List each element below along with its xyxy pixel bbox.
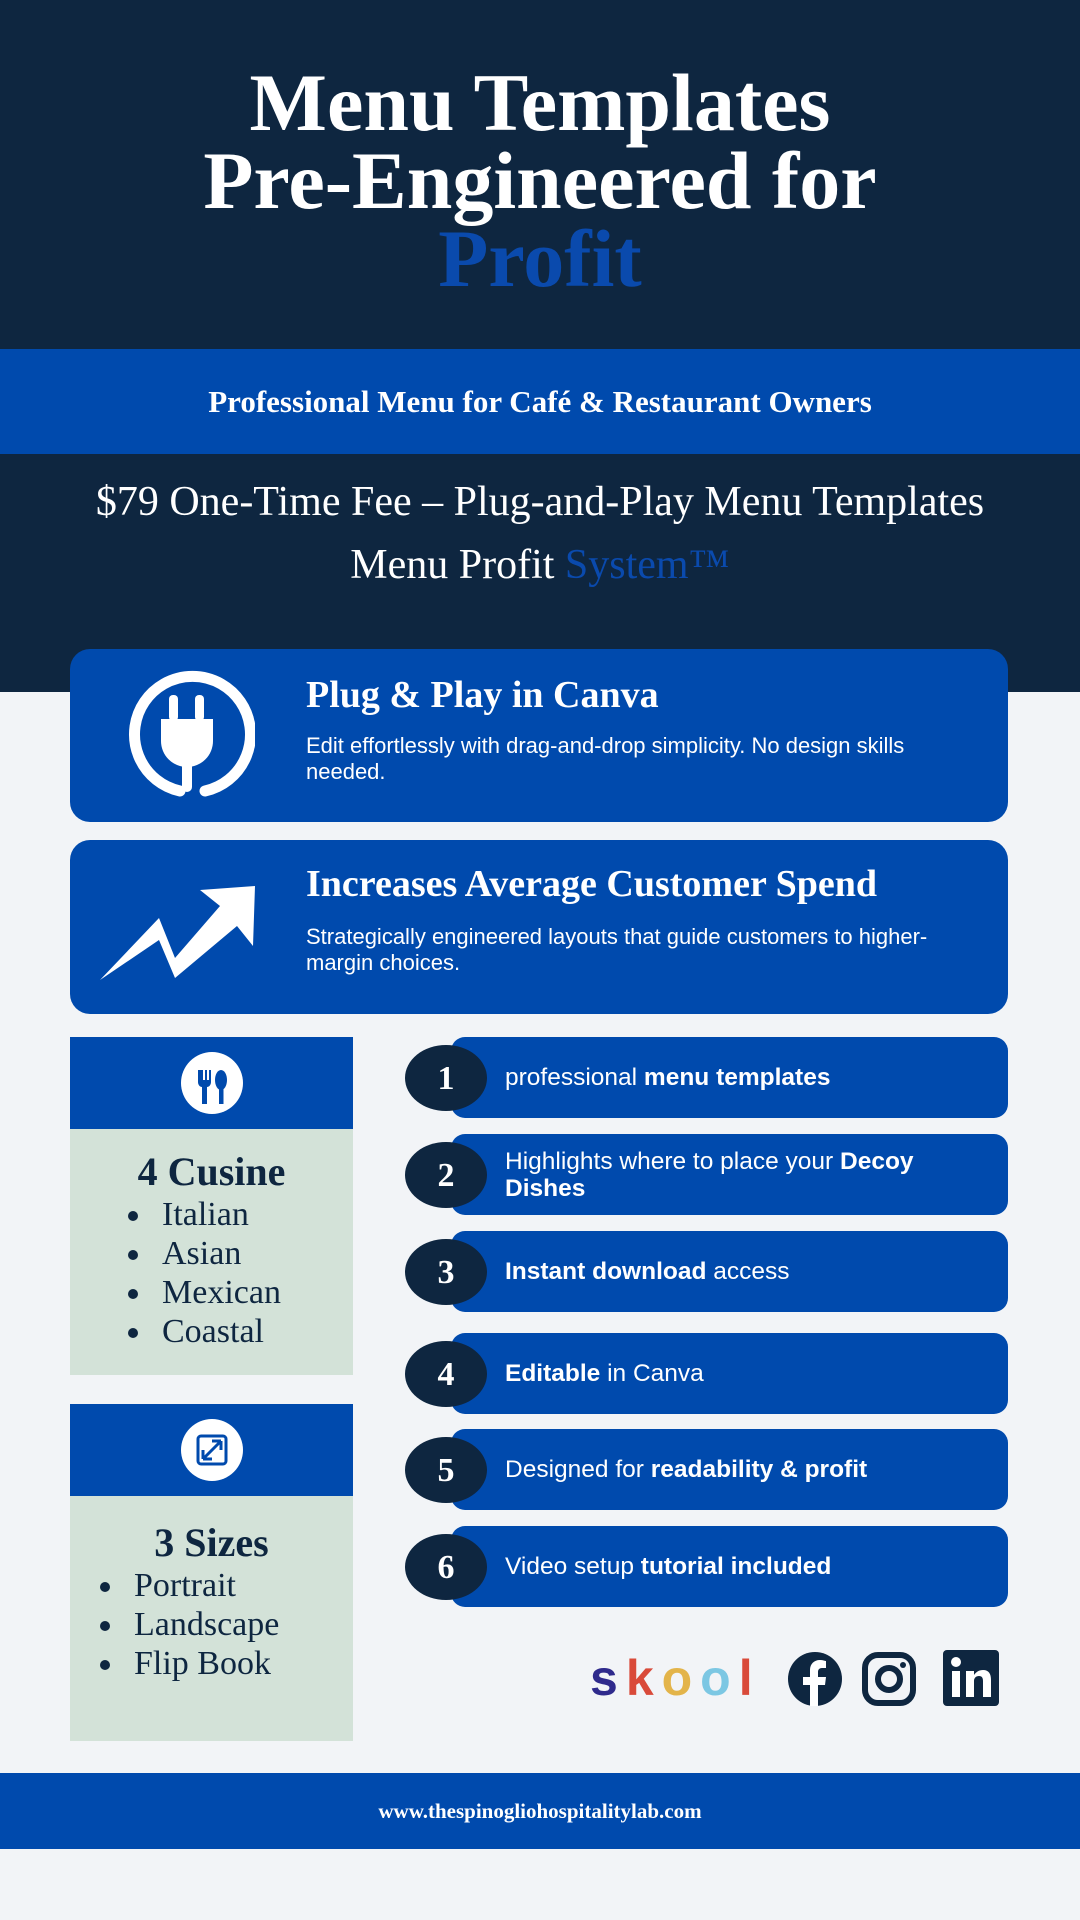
icon: rising arrow	[100, 886, 255, 980]
panel: cuisines: Mexican	[162, 1274, 281, 1311]
card: plug & play: Edit effortlessly with drag-and-drop simplicity. No design skills needed.	[306, 733, 904, 784]
panel: cuisines: Asian	[162, 1235, 241, 1272]
card: customer spend	[70, 840, 1008, 1014]
text: 3	[438, 1254, 454, 1290]
panel: cuisines	[70, 1037, 353, 1375]
title: Menu Templates	[250, 57, 830, 148]
subtitle band	[0, 349, 1080, 454]
dark pricing section	[0, 454, 1080, 692]
logo: skool: skool	[590, 1650, 761, 1706]
text: 4	[438, 1356, 454, 1392]
icon: fork and spoon	[181, 1052, 243, 1114]
text: 1	[438, 1060, 454, 1096]
feature row 1: professional menu templates	[505, 1064, 830, 1091]
feature row 3: Instant download access	[505, 1258, 790, 1285]
panel: sizes: 3 Sizes	[154, 1520, 269, 1565]
text: 2	[438, 1156, 454, 1194]
text: 6	[438, 1548, 454, 1586]
feature row 2	[451, 1134, 1008, 1215]
panel: cuisines: 4 Cusine	[138, 1149, 285, 1194]
text: 5	[438, 1452, 454, 1488]
feature row 3	[451, 1231, 1008, 1312]
header background	[0, 0, 1080, 349]
title: Profit	[438, 213, 642, 304]
dark pricing section: Menu Profit System™	[350, 542, 730, 588]
feature row 2: Highlights where to place your Decoy Dishes	[505, 1148, 914, 1202]
feature row 4: Editable in Canva	[505, 1360, 704, 1387]
panel: sizes: Flip Book	[134, 1645, 271, 1682]
logo: linkedin	[943, 1650, 999, 1706]
title	[203, 57, 877, 304]
feature row 6: Video setup tutorial included	[505, 1553, 831, 1580]
panel: sizes	[70, 1404, 353, 1741]
panel: sizes: Portrait	[134, 1567, 236, 1604]
panel: sizes: Landscape	[134, 1606, 279, 1643]
icon: resize	[181, 1419, 243, 1481]
feature row 5	[451, 1429, 1008, 1510]
card: customer spend: Increases Average Customer Spend	[306, 863, 877, 905]
footer	[0, 1773, 1080, 1849]
feature row 1	[451, 1037, 1008, 1118]
title: Pre-Engineered for	[203, 135, 877, 226]
card: customer spend: Strategically engineered layouts that guide customers to higher-margin choices.	[306, 924, 927, 975]
panel: cuisines: Italian	[162, 1196, 249, 1233]
social logos	[590, 1650, 999, 1706]
feature row 4	[451, 1333, 1008, 1414]
card: plug & play	[70, 649, 1008, 822]
feature row 6	[451, 1526, 1008, 1607]
feature row 5: Designed for readability & profit	[505, 1456, 867, 1483]
dark pricing section: $79 One-Time Fee – Plug-and-Play Menu Templates	[96, 479, 984, 525]
subtitle band: Professional Menu for Café & Restaurant Owners	[208, 384, 872, 418]
icon: plug	[129, 670, 255, 796]
logo: facebook	[788, 1652, 842, 1706]
panel: cuisines: Coastal	[162, 1313, 264, 1350]
card: plug & play: Plug & Play in Canva	[306, 674, 659, 716]
logo: instagram	[862, 1652, 916, 1706]
footer: www.thespinogliohospitalitylab.com	[378, 1798, 702, 1822]
